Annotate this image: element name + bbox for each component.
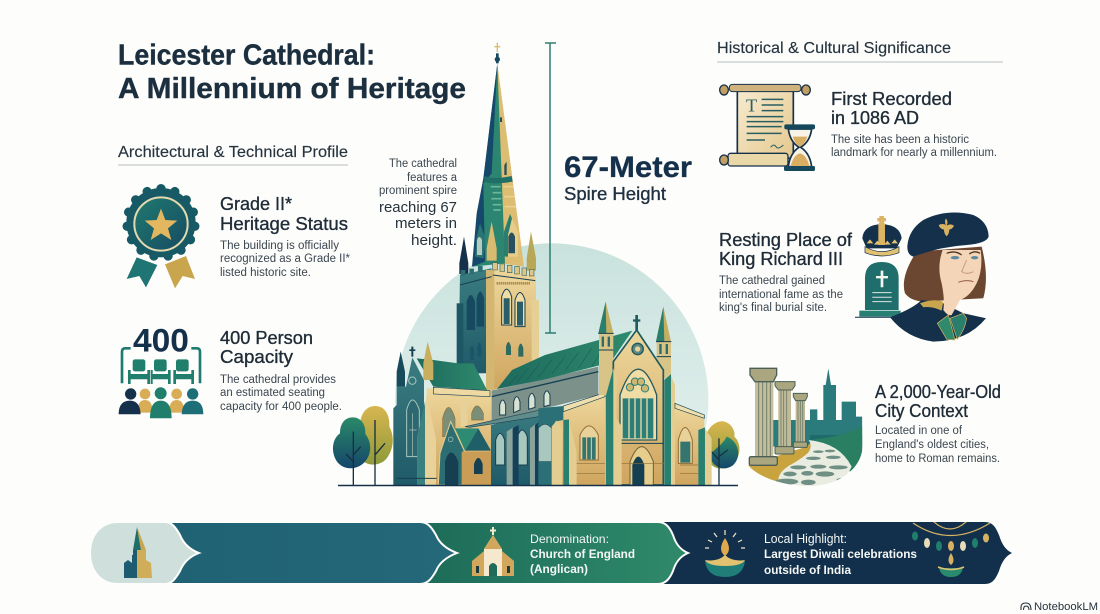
callout: spire description: prominent spire [379, 185, 457, 197]
icon: garland [912, 522, 990, 551]
bracket [122, 348, 200, 383]
text: 400 person capacity [220, 328, 342, 413]
stat: 67-meter spire height: 67-Meter [564, 151, 692, 184]
scroll: T [746, 96, 757, 116]
icon: scroll and hourglass [720, 84, 815, 171]
text: first recorded in 1086 AD: landmark for nearly a millennium. [831, 147, 997, 159]
left transept, left tower and north aisle [393, 342, 550, 485]
medal ring and star [134, 197, 188, 251]
segment: pale start [90, 522, 199, 584]
right tree [704, 421, 740, 485]
stat: 67-meter spire height [564, 151, 692, 204]
text: local highlight: Largest Diwali celebrations [764, 547, 917, 561]
text: 400 person capacity: Capacity [220, 347, 293, 367]
text: denomination: Denomination: [530, 532, 609, 546]
front buttresses [606, 368, 680, 485]
text: denomination: Church of England [530, 547, 635, 561]
text: denomination: (Anglican) [530, 562, 588, 576]
column two [775, 382, 795, 454]
cobblestones [775, 450, 848, 485]
text: resting place of King Richard III [719, 230, 853, 314]
left trees [333, 406, 393, 485]
west door [630, 447, 653, 485]
text: 400 person capacity: an estimated seating [220, 387, 325, 399]
icon: small diya [938, 553, 964, 577]
scalloped seal [122, 184, 200, 261]
spire and tower [457, 43, 540, 391]
text: grade II heritage status: recognized as a Grade II* [220, 253, 351, 265]
gravestone [855, 262, 901, 317]
text: 2,000-year-old city context: England's oldest cities, [875, 439, 989, 451]
number 400: 400 [133, 322, 189, 359]
heading: historical and cultural significance: Historical & Cultural Significance [717, 40, 951, 57]
callout: spire description: features a [407, 172, 458, 184]
spire dormers [475, 214, 518, 258]
callout: spire description [379, 158, 458, 249]
logo: NotebookLM: NotebookLM [1034, 601, 1098, 613]
text: resting place of King Richard III: Resting Place of [719, 230, 853, 250]
height measure line [545, 43, 556, 333]
callout: spire description: The cathedral [389, 158, 457, 170]
south aisle [538, 393, 605, 485]
icon: heritage medal [122, 184, 200, 288]
hourglass [784, 124, 815, 171]
icon: Roman columns and city skyline [747, 368, 862, 487]
text: 400 person capacity: The cathedral provides [220, 374, 336, 386]
transept buttress [417, 396, 436, 485]
great window [613, 369, 663, 443]
text: resting place of King Richard III: The cathedral gained [719, 275, 825, 287]
heading: architectural and technical profile: Architectural & Technical Profile [118, 144, 348, 161]
crown [862, 216, 902, 256]
column three [793, 393, 807, 447]
text: 400 person capacity: 400 Person [220, 328, 313, 348]
banner: facts ribbon [90, 518, 1012, 584]
string courses [577, 463, 698, 473]
skyline [773, 368, 862, 447]
icon: large diya [705, 530, 745, 577]
segment: local highlight [664, 522, 1012, 584]
text: first recorded in 1086 AD [831, 89, 997, 159]
text: grade II heritage status: listed historic site. [220, 267, 311, 279]
text: first recorded in 1086 AD: in 1086 AD [831, 108, 919, 128]
north aisle [465, 408, 550, 485]
icon: 400 seats and people [119, 322, 203, 418]
gable [613, 315, 663, 485]
people [119, 387, 203, 418]
title: A Millennium of Heritage [118, 73, 466, 105]
text: grade II heritage status: Heritage Status [220, 214, 348, 234]
nave roof and clerestory [465, 331, 632, 427]
transept wall [417, 358, 492, 485]
clerestory windows [500, 391, 550, 415]
text: 2,000-year-old city context: Located in one of [875, 425, 963, 437]
turrets [598, 302, 671, 395]
text: grade II heritage status: Grade II* [220, 194, 292, 214]
text: 2,000-year-old city context: City Context [875, 401, 968, 421]
aisle buttress [563, 419, 577, 485]
text: local highlight [764, 532, 917, 577]
callout: spire description: height. [411, 232, 457, 249]
text: grade II heritage status [220, 194, 351, 279]
ribbon tails [127, 256, 195, 288]
string course [397, 477, 437, 480]
text: first recorded in 1086 AD: The site has been a historic [831, 134, 969, 146]
illustration: cathedral with sky circle and trees [333, 43, 740, 557]
ground and path [813, 427, 862, 472]
title: Leicester Cathedral: [118, 40, 375, 72]
spire [472, 43, 524, 267]
text: local highlight: Local Highlight: [764, 532, 847, 546]
right wing [675, 403, 712, 485]
porch [438, 422, 491, 485]
text: grade II heritage status: The building is officially [220, 240, 339, 252]
segment: denomination [410, 522, 688, 584]
text: local highlight: outside of India [764, 563, 851, 577]
icon: small church [472, 527, 514, 576]
text: 2,000-year-old city context: home to Roman remains. [875, 453, 1000, 465]
sky circle [395, 243, 708, 485]
ground line [338, 484, 738, 486]
left gable tower [393, 342, 433, 485]
text: 400 person capacity: capacity for 400 people. [220, 401, 342, 413]
tower windows [467, 289, 525, 360]
text: resting place of King Richard III: king's final burial site. [719, 302, 827, 314]
callout: spire description: meters in [395, 215, 457, 232]
icon: mini cathedral [124, 527, 152, 578]
text: resting place of King Richard III: King Richard III [719, 249, 843, 269]
text: denomination [530, 532, 635, 576]
stat: 67-meter spire height: Spire Height [564, 184, 666, 204]
pinnacles [459, 222, 536, 274]
segment: teal blank [160, 522, 457, 584]
icon: crown, gravestone and Richard III portrait [855, 213, 989, 342]
portrait [890, 213, 989, 342]
seats [128, 359, 194, 384]
text: 2,000-year-old city context [875, 382, 1001, 465]
tower [457, 263, 540, 391]
text: first recorded in 1086 AD: First Recorded [831, 89, 952, 109]
west front and south aisle [538, 302, 712, 485]
title [118, 40, 466, 105]
text: resting place of King Richard III: international fame as the [719, 289, 843, 301]
column one [749, 368, 777, 465]
text: 2,000-year-old city context: A 2,000-Year-Old [875, 382, 1001, 402]
callout: spire description: reaching 67 [379, 199, 457, 216]
